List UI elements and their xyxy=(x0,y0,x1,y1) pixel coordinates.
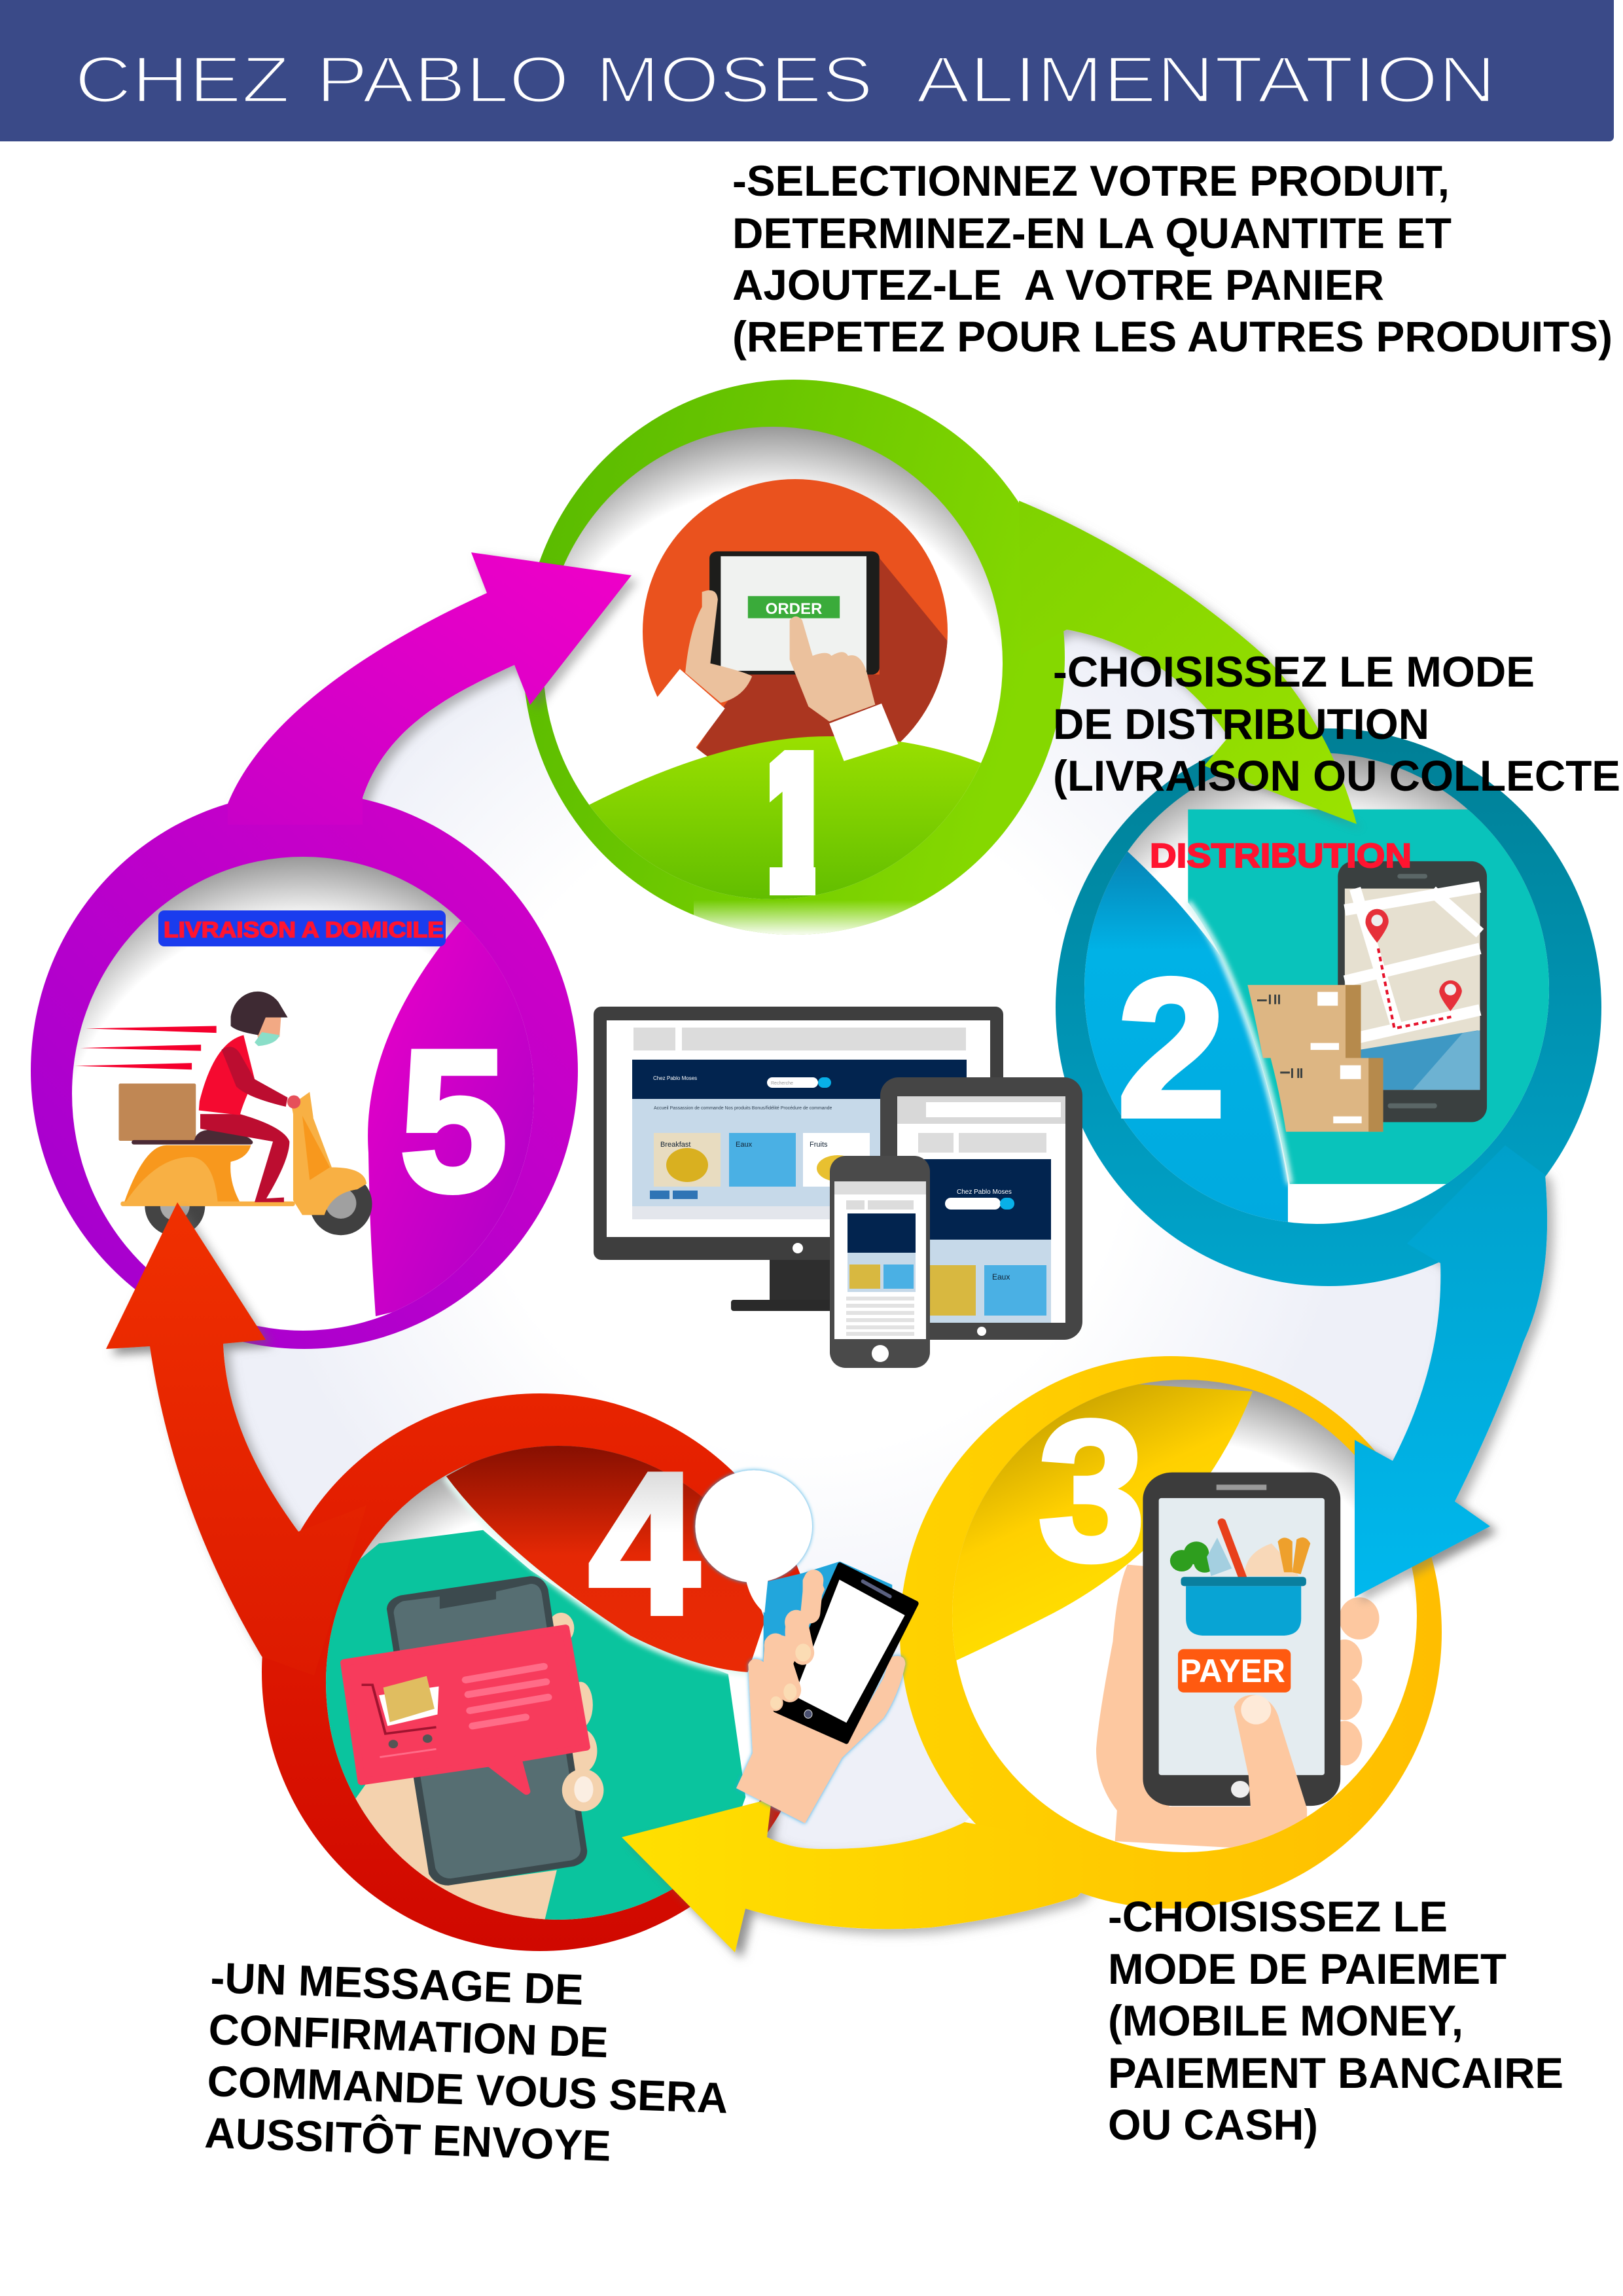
arrow: step 4 to step 5 xyxy=(106,1202,366,1676)
icon: delivery scooter rider xyxy=(75,992,372,1236)
title text xyxy=(75,43,1496,117)
arrow: step 2 to step 3 xyxy=(1355,1145,1547,1597)
text block: step 4 instructions: -UN MESSAGE DE xyxy=(210,1953,584,2014)
panel: step 1 order xyxy=(523,380,1065,939)
icon: hand with shopping phone xyxy=(1096,1473,1380,1849)
panel: step 3 payment xyxy=(900,1356,1442,1909)
text block: step 2 instructions: DE DISTRIBUTION xyxy=(1053,700,1429,748)
blue and teal backgrounds xyxy=(1060,802,1559,1225)
text block: step 3 instructions: -CHOISISSEZ LE xyxy=(1108,1892,1448,1941)
smartphone xyxy=(830,1156,930,1368)
text block: step 1 instructions: -SELECTIONNEZ VOTRE PRODUIT, xyxy=(732,156,1450,205)
order button label: ORDER xyxy=(766,600,822,618)
desktop monitor: Fruits xyxy=(810,1141,828,1149)
text block: step 1 instructions: AJOUTEZ-LE A VOTRE PANIER xyxy=(732,260,1384,309)
text block: step 1 instructions: (REPETEZ POUR LES AUTRES PRODUITS) xyxy=(732,312,1613,361)
tablet xyxy=(880,1077,1082,1340)
text block: step 3 instructions: PAIEMENT BANCAIRE xyxy=(1108,2049,1563,2097)
text block: step 3 instructions xyxy=(1108,1892,1563,2149)
number 2: 2 xyxy=(1118,939,1225,1157)
text block: step 1 instructions xyxy=(732,156,1613,361)
desktop monitor: Accueil Passassion de commande Nos produits Bonus/fidélité Procédure de commande xyxy=(654,1106,832,1111)
text block: step 4 instructions: CONFIRMATION DE xyxy=(208,2005,609,2066)
text block: step 4 instructions: AUSSITÔT ENVOYE xyxy=(204,2108,612,2170)
icon: map phone and parcels xyxy=(1247,861,1487,1132)
number 1: 1 xyxy=(753,711,836,939)
delivery label badge xyxy=(158,910,446,946)
green hill xyxy=(589,736,981,899)
desktop monitor: Recherche xyxy=(771,1081,793,1086)
number 5: 5 xyxy=(400,1009,507,1232)
text block: step 2 instructions xyxy=(1053,647,1620,800)
text block: step 4 instructions xyxy=(204,1953,729,2170)
magenta crescent xyxy=(368,916,543,1316)
text block: step 3 instructions: MODE DE PAIEMET xyxy=(1108,1945,1507,1993)
central lavender background xyxy=(223,630,1440,1849)
title text: MOSES xyxy=(596,43,873,117)
desktop monitor: Eaux xyxy=(736,1141,753,1149)
arrow: step 1 to step 2 xyxy=(1019,501,1357,824)
number 3: 3 xyxy=(1039,1380,1145,1601)
tablet: Eaux xyxy=(992,1272,1010,1282)
title text: PABLO xyxy=(316,43,569,117)
arrow: step 5 to step 1 xyxy=(228,552,632,825)
panel: step 4 confirmation message xyxy=(262,1393,818,1951)
icon: hands holding order tablet xyxy=(657,551,898,761)
text block: step 2 instructions: (LIVRAISON OU COLLECTE xyxy=(1053,751,1620,800)
text block: step 3 instructions: (MOBILE MONEY, xyxy=(1108,1996,1463,2045)
number 4: 4 xyxy=(589,1431,700,1655)
arrowhead shadows on the circles xyxy=(113,558,1497,1958)
distribution label: DISTRIBUTION xyxy=(1150,837,1412,875)
text block: step 2 instructions: -CHOISISSEZ LE MODE xyxy=(1053,647,1535,696)
desktop monitor: Breakfast xyxy=(660,1141,690,1149)
title text: CHEZ xyxy=(75,43,290,117)
icon: phone with notification card xyxy=(344,1576,603,1924)
title banner xyxy=(0,0,1614,141)
panel: step 2 distribution xyxy=(1056,728,1601,1286)
payer label: PAYER xyxy=(1180,1653,1285,1689)
arrow: step 3 to step 4 xyxy=(622,1799,1113,1952)
desktop monitor xyxy=(594,1007,1003,1311)
icon: hand, speech bubble and smartphone xyxy=(695,1470,916,1823)
tablet: Chez Pablo Moses xyxy=(957,1189,1012,1196)
centre: responsive devices xyxy=(594,1007,1082,1368)
orange disc with tablet shadow xyxy=(643,479,948,757)
delivery label badge: LIVRAISON A DOMICILE xyxy=(164,918,444,942)
title text: ALIMENTATION xyxy=(916,43,1496,117)
text block: step 1 instructions: DETERMINEZ-EN LA QUANTITE ET xyxy=(732,209,1452,257)
panel: step 5 home delivery xyxy=(31,793,578,1349)
arrow shadows on the background xyxy=(106,501,1547,1952)
teal background and red crescent xyxy=(305,1413,765,1935)
yellow crescent xyxy=(952,1384,1253,1660)
text block: step 4 instructions: COMMANDE VOUS SERA xyxy=(207,2056,729,2122)
text block: step 3 instructions: OU CASH) xyxy=(1108,2100,1318,2149)
desktop monitor: Chez Pablo Moses xyxy=(653,1075,697,1081)
